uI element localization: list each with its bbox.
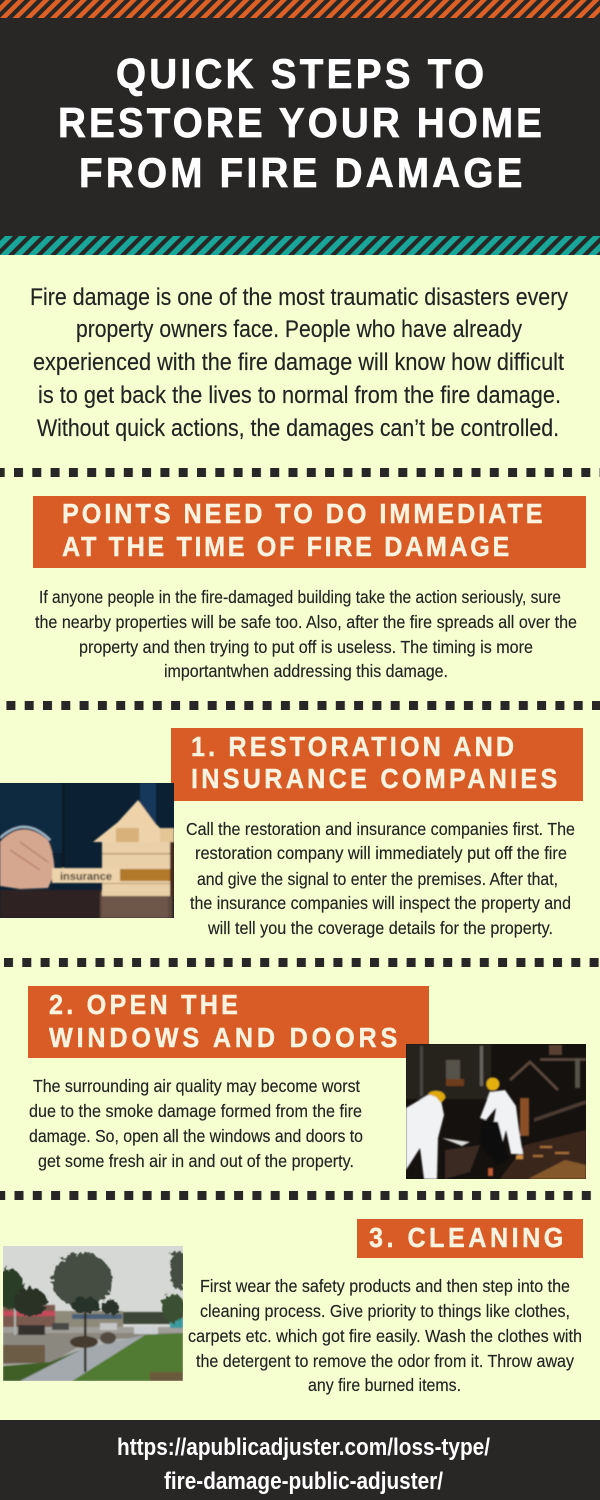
title: FROM FIRE DAMAGE [79, 148, 522, 196]
intro paragraph: property owners face. People who have already [76, 316, 522, 343]
heading: step 2: 2. OPEN THE [49, 989, 238, 1020]
points paragraph: property and then trying to put off is useless. The timing is more [79, 637, 533, 657]
title [58, 49, 542, 196]
heading: step 2 [28, 986, 429, 1058]
step 1 paragraph: Call the restoration and insurance companies first. The [186, 819, 575, 839]
step 2 paragraph [29, 1076, 363, 1171]
step 1 paragraph: will tell you the coverage details for the property. [207, 918, 553, 938]
step 2 paragraph: damage. So, open all the windows and doors to [29, 1126, 363, 1146]
step 2 paragraph: The surrounding air quality may become worst [33, 1076, 360, 1096]
step 3 paragraph: any fire burned items. [308, 1375, 461, 1395]
step 3 paragraph: cleaning process. Give priority to things like clothes, [200, 1301, 570, 1321]
photo: insurance house blocks: insurance [60, 871, 112, 883]
footer with url [0, 1420, 600, 1500]
points paragraph [35, 587, 577, 681]
footer with url: https://apublicadjuster.com/loss-type/ [117, 1434, 490, 1461]
heading: step 1: 1. RESTORATION AND [191, 731, 514, 762]
step 1 paragraph: and give the signal to enter the premises. After that, [197, 869, 558, 889]
orange stripe band [0, 0, 600, 18]
heading: step 2: WINDOWS AND DOORS [49, 1022, 397, 1053]
intro paragraph [30, 284, 568, 442]
heading: step 3 [357, 1219, 583, 1258]
photo: workers in burnt building [406, 1044, 586, 1179]
photo: insurance house blocks [0, 783, 174, 918]
step 2 paragraph: due to the smoke damage formed from the fire [29, 1101, 362, 1121]
step 3 paragraph: the detergent to remove the odor from it. Throw away [196, 1351, 574, 1371]
heading: step 1: INSURANCE COMPANIES [191, 763, 557, 794]
title: QUICK STEPS TO [116, 49, 484, 97]
step 3 paragraph: First wear the safety products and then step into the [200, 1276, 570, 1296]
heading: step 3: 3. CLEANING [369, 1222, 563, 1253]
step 2 paragraph: get some fresh air in and out of the property. [38, 1151, 354, 1171]
step 3 paragraph [188, 1276, 582, 1395]
footer with url: fire-damage-public-adjuster/ [164, 1468, 443, 1495]
title: RESTORE YOUR HOME [58, 98, 542, 146]
intro paragraph: is to get back the lives to normal from the fire damage. [38, 382, 561, 409]
heading: points to do: AT THE TIME OF FIRE DAMAGE [62, 531, 509, 562]
photo: flooded street [0, 1246, 186, 1381]
heading: points to do [33, 496, 586, 568]
step 1 paragraph [186, 819, 575, 938]
points paragraph: importantwhen addressing this damage. [164, 661, 448, 681]
teal stripe band [0, 236, 600, 255]
heading: step 1 [171, 728, 583, 801]
step 1 paragraph: restoration company will immediately put off the fire [195, 843, 567, 863]
header banner [0, 0, 600, 255]
heading: points to do: POINTS NEED TO DO IMMEDIATE [62, 498, 543, 529]
step 1 paragraph: the insurance companies will inspect the property and [190, 893, 571, 913]
